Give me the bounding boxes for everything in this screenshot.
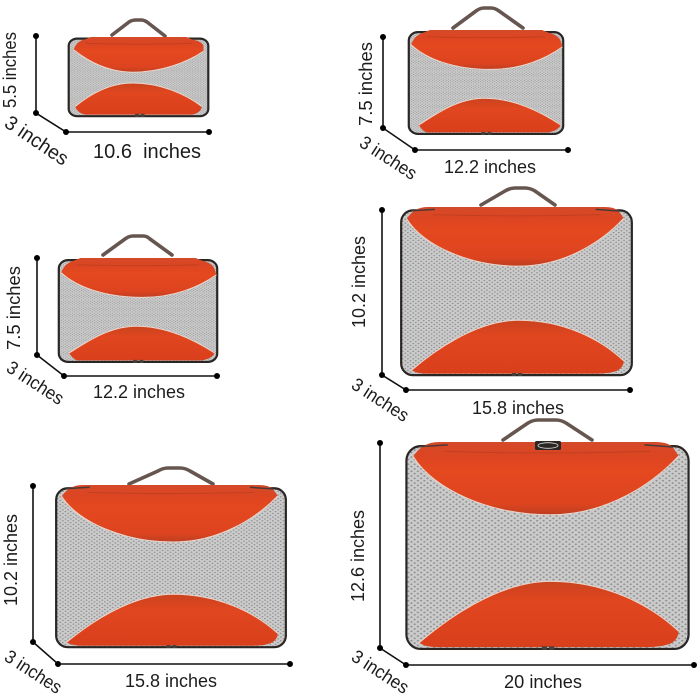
bag group: large 15.8 x 10.2 x 3 inches left (0, 468, 293, 698)
label: depth: 3 inches (0, 112, 72, 170)
dimension lines (380, 443, 694, 665)
bag group: medium 12.2 x 7.5 x 3 inches top right (355, 8, 571, 184)
dimension lines (33, 486, 290, 664)
label: height: 10.2 inches (348, 236, 369, 328)
dimension end dots (30, 483, 293, 667)
label: width: 20 inches (504, 671, 582, 692)
handle (453, 8, 523, 28)
brand tag (535, 441, 561, 450)
dimension lines (383, 37, 568, 150)
handle (103, 236, 172, 255)
label: width: 10.6 inches (93, 141, 201, 163)
bag body (56, 485, 286, 648)
dimension end dots (377, 440, 697, 668)
handle (481, 188, 555, 205)
label: width: 12.2 inches (93, 381, 185, 402)
label: width: 12.2 inches (444, 156, 536, 177)
bag body (59, 258, 217, 363)
handle (503, 420, 592, 440)
dimension lines (382, 210, 630, 390)
dimension end dots (33, 33, 212, 135)
label: depth: 3 inches (348, 373, 413, 426)
handle (112, 20, 165, 36)
label: depth: 3 inches (1, 645, 66, 698)
handle (129, 468, 213, 484)
dimension lines (37, 258, 217, 376)
dimension end dots (34, 255, 220, 379)
bag body (406, 442, 689, 650)
label: height: 7.5 inches (355, 42, 376, 126)
bag body (69, 37, 208, 117)
bag body (409, 30, 563, 135)
label: height: 10.2 inches (0, 514, 21, 606)
bag body (401, 207, 632, 376)
label: height: 7.5 inches (3, 266, 24, 350)
dimension lines (36, 36, 209, 132)
bag group: small 10.6 x 5.5 x 3 inches (0, 20, 212, 170)
dimension end dots (379, 207, 633, 393)
label: depth: 3 inches (356, 131, 421, 184)
label: depth: 3 inches (3, 356, 68, 409)
label: height: 12.6 inches (347, 510, 368, 602)
label: width: 15.8 inches (125, 670, 217, 691)
bag group: medium 12.2 x 7.5 x 3 inches left (3, 236, 220, 409)
bag group: extra large 20 x 12.6 x 3 inches (347, 420, 697, 698)
dimension end dots (380, 34, 571, 153)
label: width: 15.8 inches (472, 397, 564, 418)
bag group: large 15.8 x 10.2 x 3 inches right (348, 188, 633, 426)
label: depth: 3 inches (348, 645, 413, 698)
